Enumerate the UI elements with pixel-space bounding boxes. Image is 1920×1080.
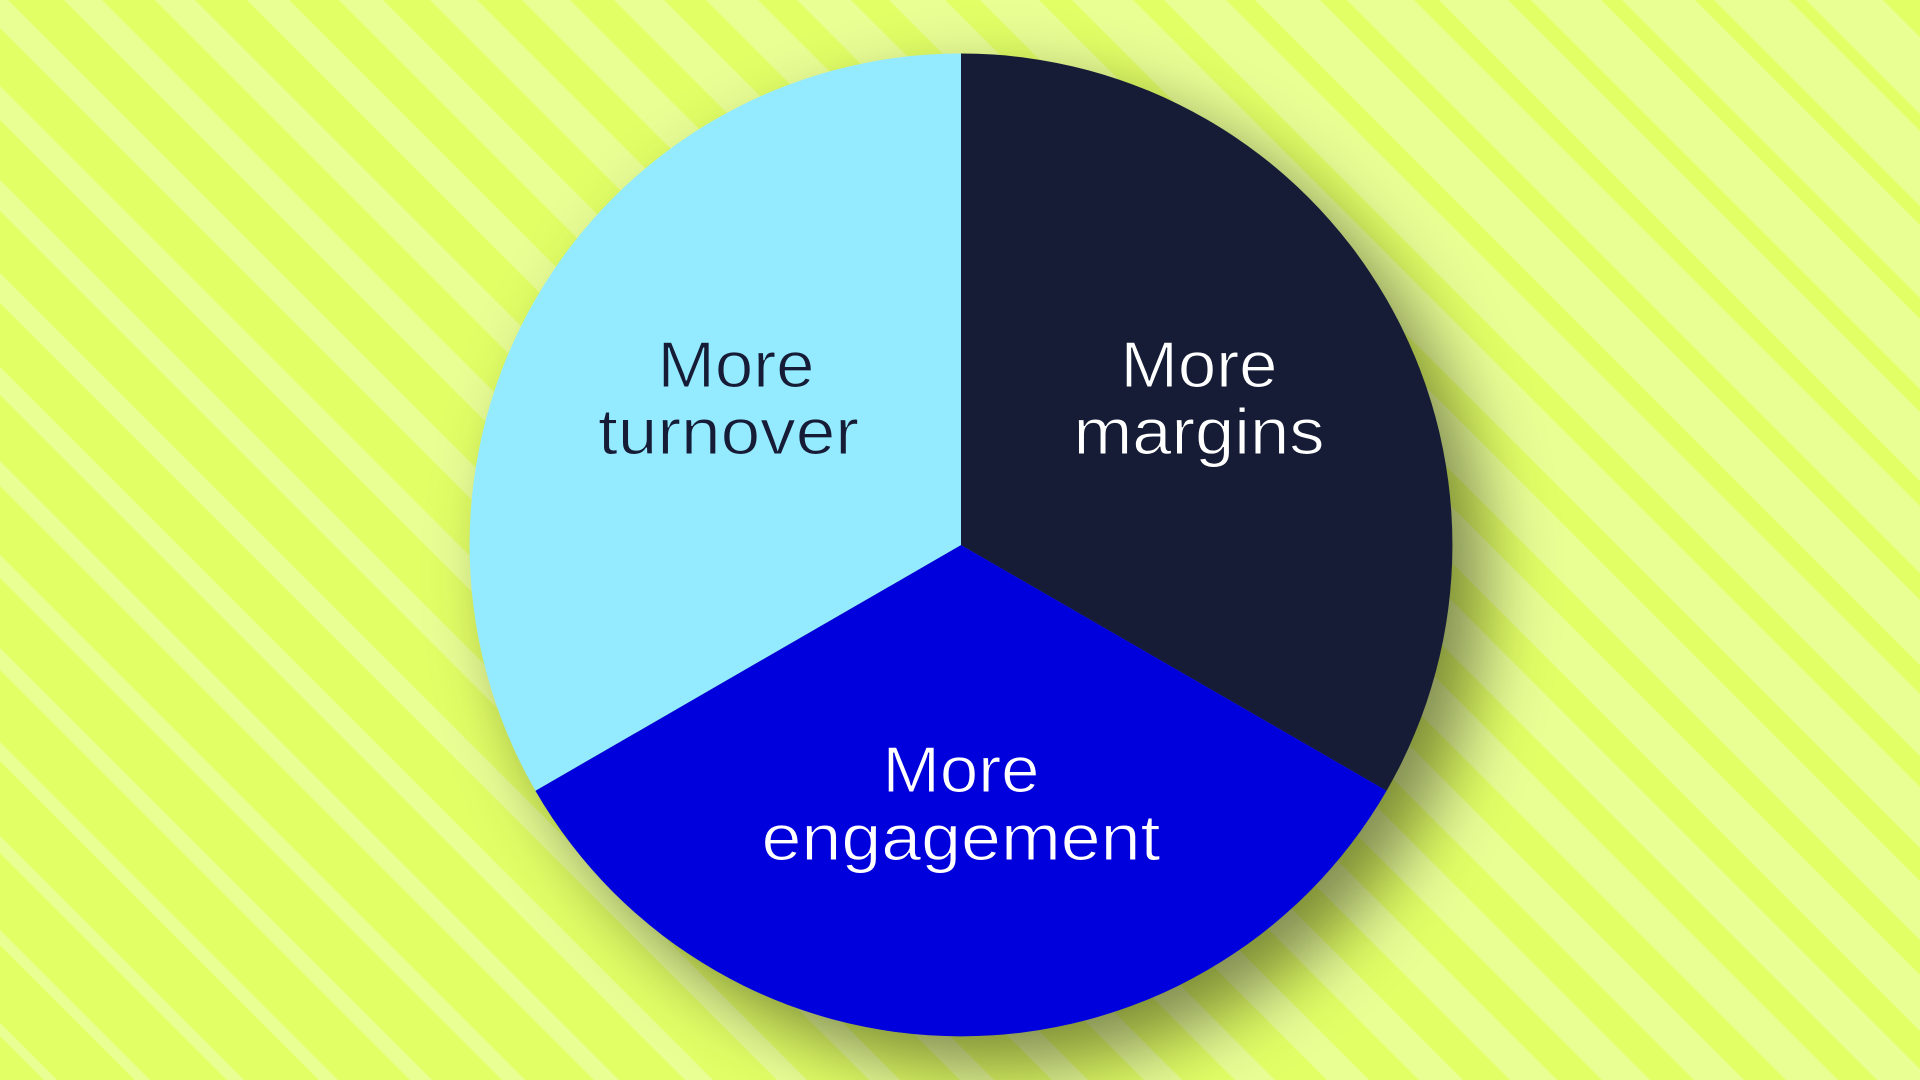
wedge: more engagement: [535, 545, 1387, 1036]
pie chart: [470, 54, 1452, 1036]
label: more engagement: More: [882, 733, 1040, 806]
wedge: more turnover: [470, 54, 961, 791]
wedge: more margins: [961, 54, 1452, 791]
label: more turnover: [598, 328, 859, 468]
label: more margins: More: [1120, 328, 1278, 401]
label: more engagement: engagement: [762, 801, 1160, 874]
label: more margins: [1074, 328, 1324, 468]
label: more turnover: turnover: [598, 395, 859, 468]
label: more engagement: [762, 733, 1160, 874]
label: more margins: margins: [1074, 395, 1324, 468]
label: more turnover: More: [658, 328, 814, 401]
drop shadow of pie: [502, 86, 1484, 1068]
